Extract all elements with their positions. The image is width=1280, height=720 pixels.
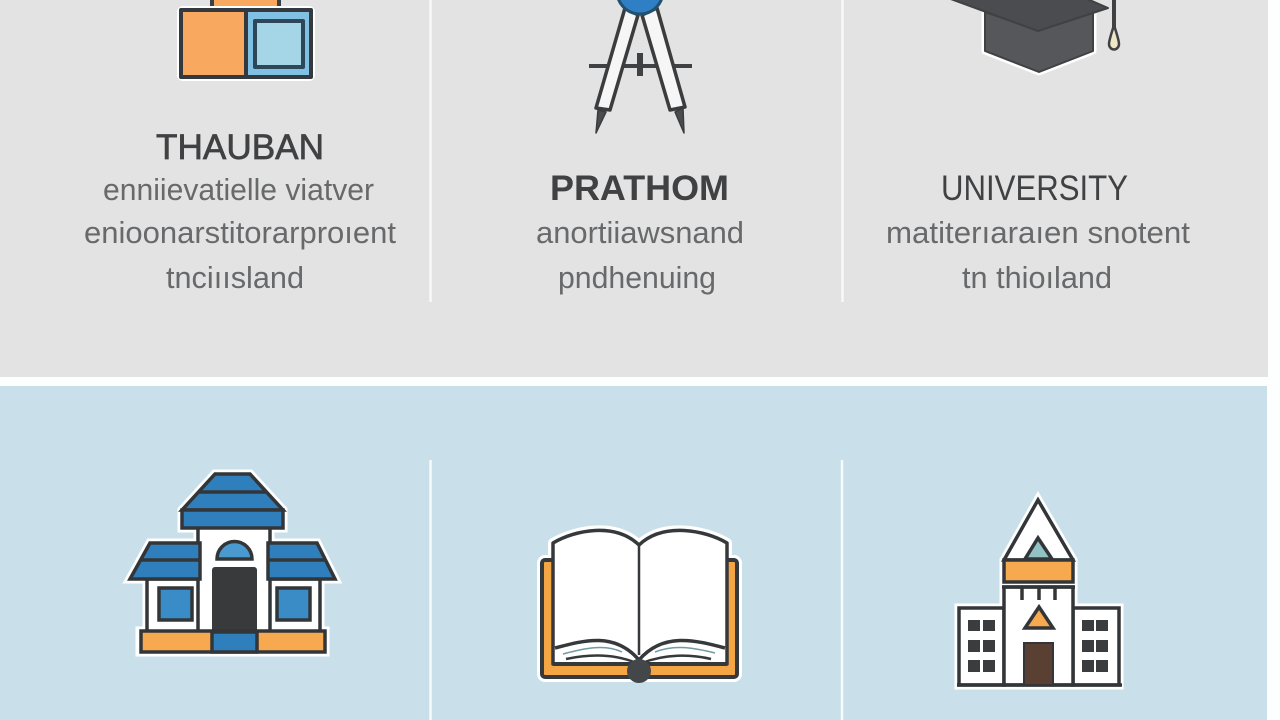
text block: PRATHOM description: pndhenuing <box>558 260 716 295</box>
heading: THAUBAN: THAUBAN <box>156 128 324 167</box>
text block: UNIVERSITY description: tn thioıland <box>962 260 1112 295</box>
text block: UNIVERSITY description <box>886 215 1190 295</box>
text block: THAUBAN description <box>84 172 396 295</box>
icon: graduation cap <box>948 0 1119 72</box>
icon: building blocks <box>181 0 311 77</box>
panel: bottom blue band <box>0 386 1267 720</box>
text block: THAUBAN description: enioonarstitorarproıent <box>84 215 396 250</box>
text block: THAUBAN description: tnciıısland <box>166 260 304 295</box>
text block: THAUBAN description: enniievatielle viatver <box>103 172 374 207</box>
icon: drawing compass <box>589 0 692 133</box>
icon: school house <box>130 474 335 652</box>
heading: PRATHOM: PRATHOM <box>550 169 729 208</box>
heading: UNIVERSITY: UNIVERSITY <box>941 169 1128 208</box>
text block: UNIVERSITY description: matiterıaraıen snotent <box>886 215 1190 250</box>
text block: PRATHOM description <box>536 215 744 295</box>
icon: university building <box>957 500 1122 685</box>
panel: top grey band <box>0 0 1268 377</box>
icon: open book <box>542 530 737 683</box>
text block: PRATHOM description: anortiiawsnand <box>536 215 744 250</box>
